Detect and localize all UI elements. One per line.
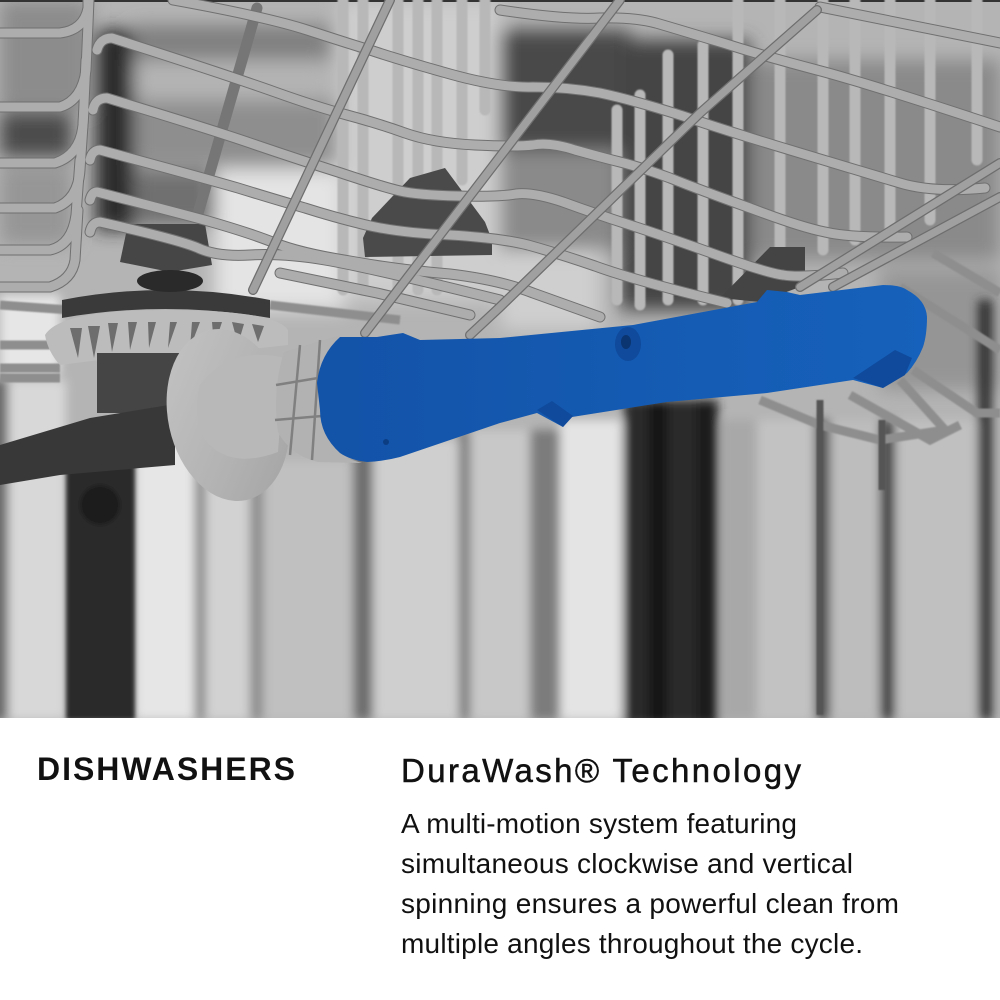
ribbed collar	[275, 335, 362, 463]
bottom white panel	[0, 718, 1000, 1000]
vertical rack tines	[343, 0, 977, 305]
blue spray arm	[317, 285, 927, 462]
grey hub disc	[166, 329, 288, 501]
description text: A multi-motion system featuring	[401, 808, 797, 839]
blurred stainless background	[0, 0, 1000, 725]
nozzle bumps	[537, 327, 912, 427]
category heading: DISHWASHERS	[37, 751, 295, 787]
description text: spinning ensures a powerful clean from	[401, 888, 899, 919]
dark support column	[66, 465, 135, 720]
description text: multiple angles throughout the cycle.	[401, 928, 863, 959]
gear wheel	[45, 270, 288, 365]
feature heading: DuraWash® Technology	[401, 752, 802, 789]
blurred lower rack wires	[0, 253, 1000, 715]
description text: simultaneous clockwise and vertical	[401, 848, 853, 879]
photo: dishwasher spray arm inside rack	[0, 0, 1000, 725]
wire rack	[0, 0, 1000, 335]
short rear rod	[197, 8, 257, 217]
dark spray arm base	[0, 353, 182, 485]
rack clips	[120, 168, 805, 302]
description text	[401, 808, 899, 959]
